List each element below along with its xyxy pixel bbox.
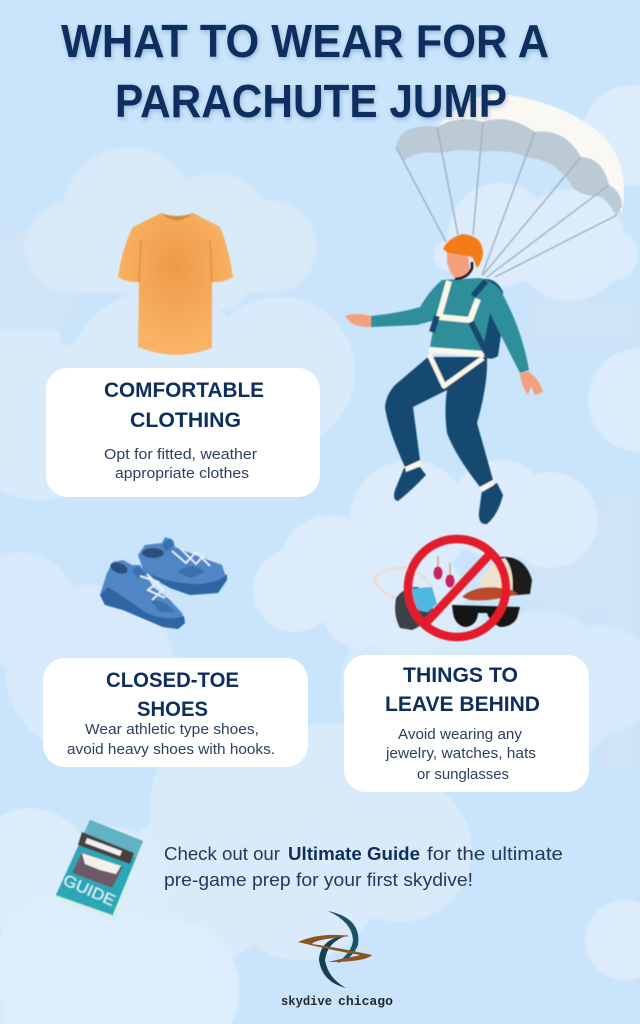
card: comfortable clothing: COMFORTABLE [104, 379, 264, 402]
card: things to leave behind [344, 655, 589, 792]
illustration: parachutist [345, 94, 624, 524]
icon: guide book [54, 820, 144, 921]
call to action text: Check out our [164, 844, 280, 864]
watch face [408, 587, 437, 612]
card: comfortable clothing [46, 368, 320, 497]
card: things to leave behind: jewelry, watches, hats [385, 746, 536, 762]
card: closed-toe shoes [43, 658, 308, 767]
shoes [394, 467, 503, 524]
call to action text: for the ultimate [427, 844, 563, 864]
card: comfortable clothing: appropriate clothes [115, 466, 249, 482]
logo mark [298, 911, 372, 988]
logo: skydive chicago: chicago [338, 994, 393, 1009]
card: comfortable clothing: Opt for fitted, weather [104, 447, 257, 463]
pearl necklace [374, 568, 432, 598]
call to action text [164, 844, 563, 890]
earrings [434, 556, 454, 588]
legs [385, 357, 493, 487]
call to action text: pre-game prep for your first skydive! [164, 870, 473, 890]
harness [429, 281, 484, 386]
sunglasses [452, 605, 520, 627]
card: closed-toe shoes: SHOES [137, 698, 208, 721]
prohibition sign [408, 539, 506, 637]
hands [345, 314, 543, 395]
card: things to leave behind: THINGS TO [403, 664, 518, 687]
logo: skydive chicago: skydive [281, 994, 332, 1009]
icon: guide book: GUIDE [60, 872, 118, 910]
icon: orange t-shirt [118, 213, 233, 355]
logo: skydive chicago [281, 911, 393, 1009]
watch [395, 587, 434, 630]
head [443, 234, 483, 279]
title: PARACHUTE JUMP [115, 75, 507, 127]
card: things to leave behind: or sunglasses [417, 767, 509, 783]
card: comfortable clothing: CLOTHING [130, 409, 241, 432]
parachute canopy [396, 94, 624, 215]
sweater [371, 278, 529, 373]
card: things to leave behind: LEAVE BEHIND [385, 693, 540, 716]
card: closed-toe shoes: CLOSED-TOE [106, 669, 239, 692]
cuffs [405, 461, 494, 492]
card: things to leave behind: Avoid wearing any [398, 727, 523, 743]
back shoe [138, 537, 227, 595]
shoulder strap [432, 281, 486, 352]
icon: banned accessories [374, 539, 532, 637]
icon: blue shoes [100, 537, 227, 629]
cap [462, 557, 532, 600]
backpack [470, 279, 503, 359]
front shoe [100, 560, 185, 629]
card: closed-toe shoes: avoid heavy shoes with hooks. [67, 742, 275, 758]
title: WHAT TO WEAR FOR A [61, 15, 549, 67]
card: closed-toe shoes: Wear athletic type shoes, [85, 722, 259, 738]
call to action text: Ultimate Guide [288, 844, 420, 864]
suspension lines [396, 122, 617, 277]
title [61, 15, 549, 127]
